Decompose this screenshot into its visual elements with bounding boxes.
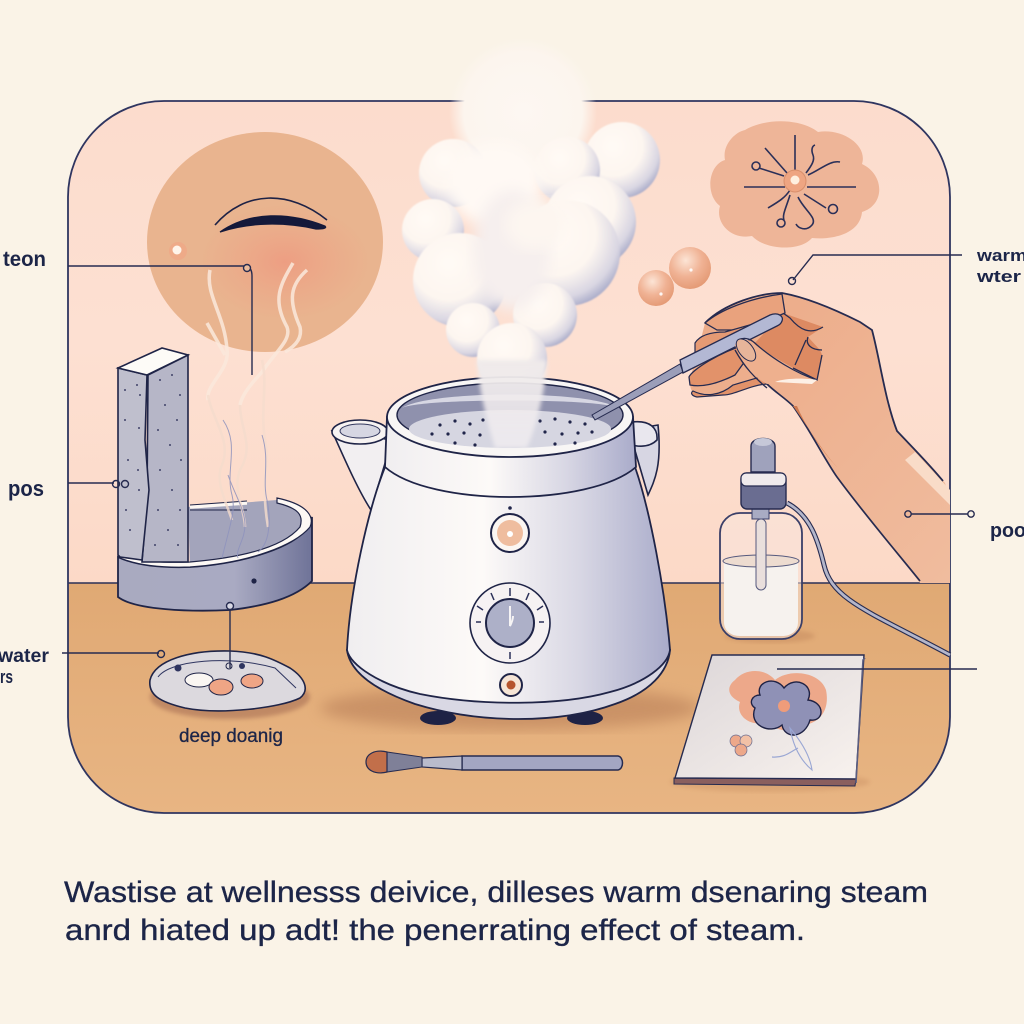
indicator light	[491, 514, 529, 552]
small dish with samples	[150, 651, 310, 719]
steam column	[477, 360, 547, 448]
collar	[385, 417, 636, 497]
power cord	[787, 503, 950, 655]
kettle device	[320, 360, 700, 730]
flower	[729, 671, 827, 731]
label: warm: warm	[976, 246, 1024, 265]
wall	[68, 101, 950, 583]
inner perforated plate	[409, 410, 611, 448]
label: pos: pos	[8, 476, 44, 501]
stylus	[592, 364, 683, 420]
rim	[387, 377, 633, 457]
icon: face with eye	[147, 132, 383, 352]
hand holding tool	[592, 293, 950, 583]
caption line 1: Wastise at wellnesss deivice, dilleses warm dsenaring steam	[64, 876, 928, 909]
dark inner palm	[753, 313, 823, 380]
feet	[420, 711, 456, 725]
labels	[0, 246, 1024, 747]
lower fingers	[689, 345, 753, 386]
caption text	[64, 876, 928, 947]
bottom button	[500, 674, 522, 696]
arm and palm	[690, 293, 950, 583]
wrist shadow	[793, 406, 838, 468]
sponge block	[142, 355, 188, 562]
caption line 2: anrd hiated up adt! the penerrating effect of steam.	[65, 914, 805, 947]
icon: pore cloud	[710, 121, 879, 248]
paintbrush	[366, 751, 622, 773]
label: rs: rs	[0, 667, 13, 687]
right spout	[629, 425, 659, 495]
label: deep doanig: deep doanig	[179, 726, 283, 747]
label: teon: teon	[3, 248, 46, 271]
sponge block and bowl	[118, 263, 312, 611]
steam wisps	[207, 263, 307, 405]
notepad with flower	[670, 655, 870, 792]
panel border	[68, 101, 950, 813]
body	[347, 467, 670, 703]
dropper bottle	[720, 438, 815, 643]
bowl rim	[118, 498, 311, 567]
callout leader lines	[62, 255, 977, 669]
panel: illustration scene	[68, 101, 950, 813]
bowl outer wall	[118, 517, 312, 611]
label: wter: wter	[976, 267, 1021, 286]
steam cloud	[402, 38, 660, 393]
bowl interior	[188, 500, 312, 567]
wrist highlight	[905, 452, 950, 505]
dial	[470, 583, 550, 663]
left spout	[332, 431, 392, 510]
icon: droplets	[638, 247, 711, 306]
table	[68, 583, 950, 813]
top finger	[705, 294, 785, 330]
middle finger	[695, 322, 760, 355]
thumb	[735, 339, 817, 384]
base	[347, 650, 670, 719]
